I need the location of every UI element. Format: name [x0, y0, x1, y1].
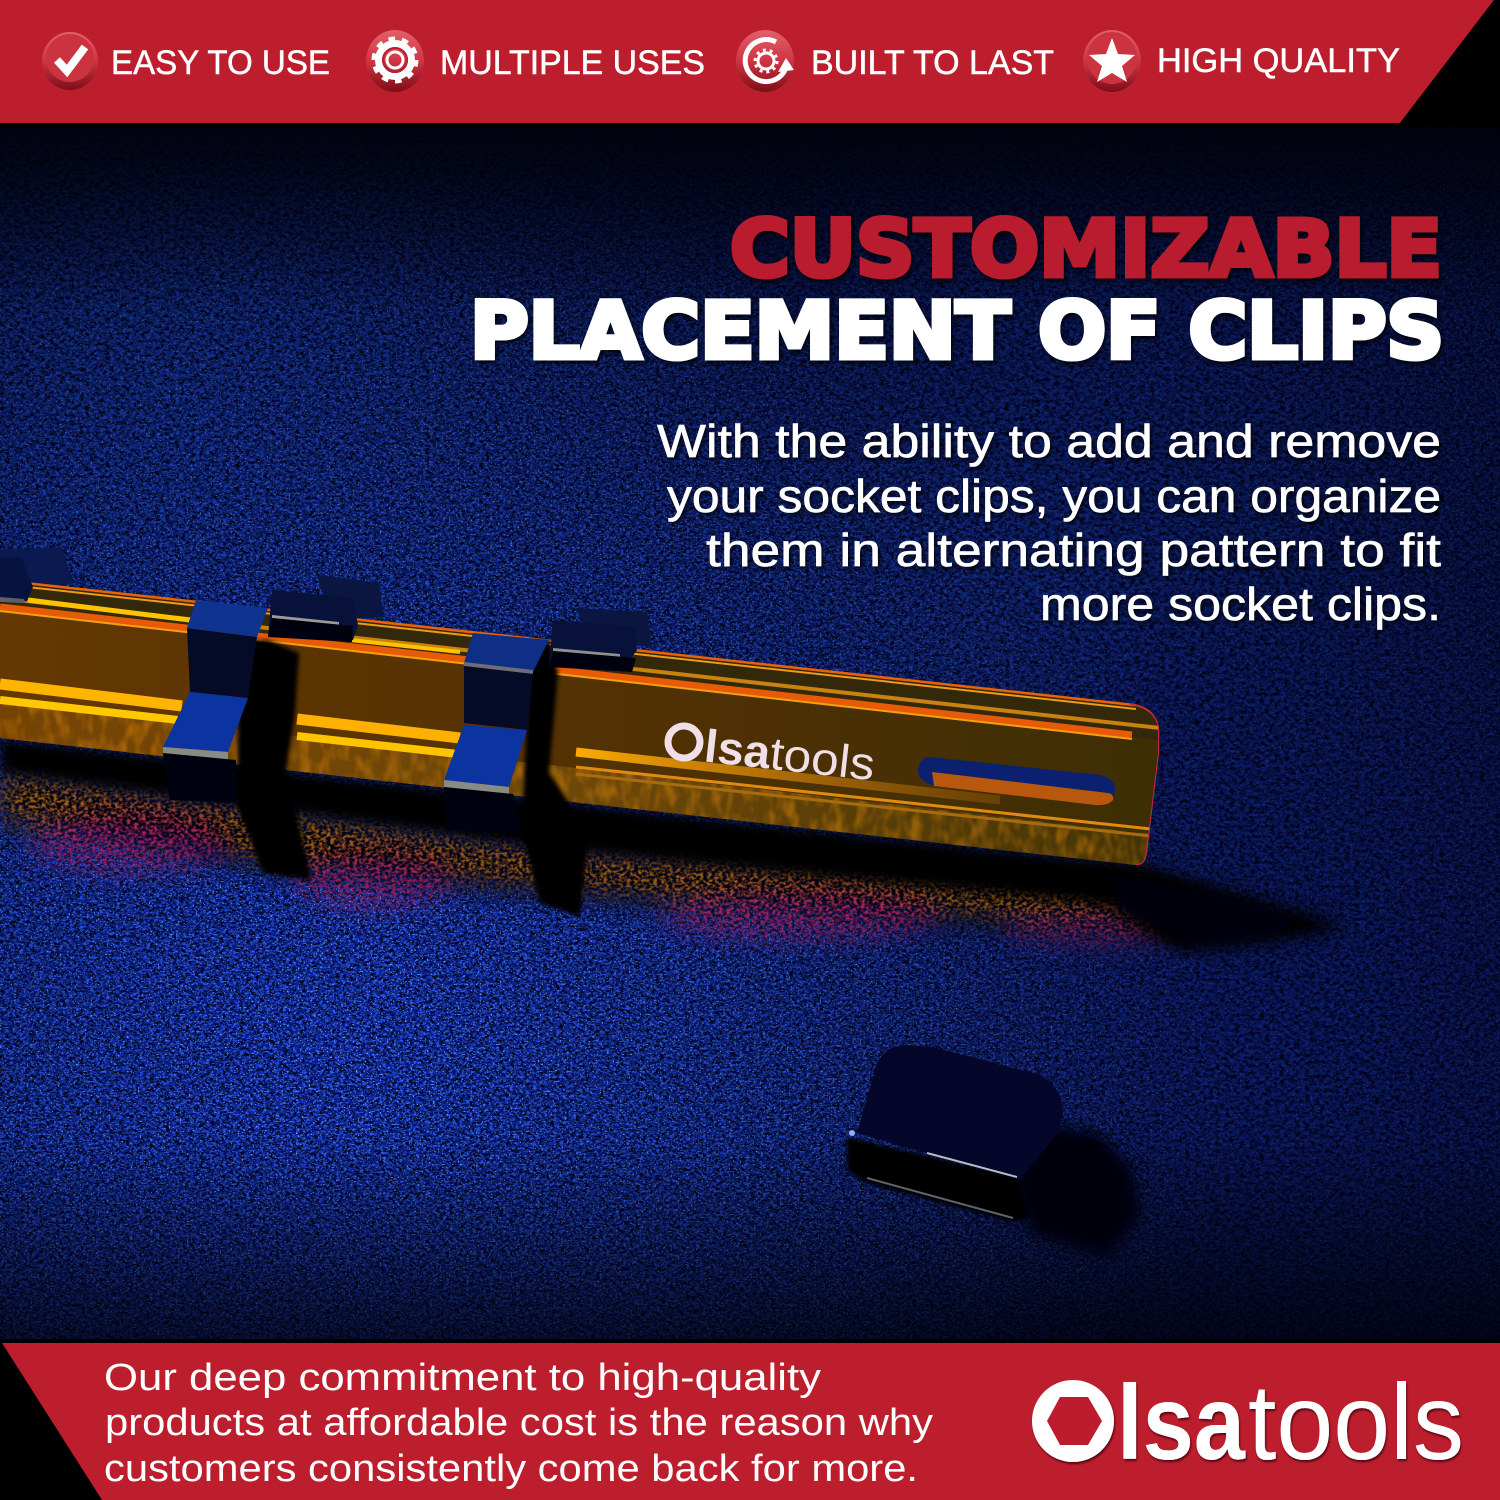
rail logo engraving — [662, 715, 878, 790]
rail logo engraving: lsa — [702, 719, 774, 779]
badge: built to last — [736, 30, 794, 92]
clip: first wrap-around clip — [163, 590, 358, 880]
brand logo: lsa — [1117, 1364, 1246, 1482]
description text: them in alternating pattern to fit — [706, 524, 1441, 576]
brand logo — [1032, 1361, 1464, 1482]
description text — [657, 415, 1441, 630]
label: multiple uses: MULTIPLE USES — [440, 44, 705, 82]
reflection of the rail on the fabric — [0, 770, 1180, 944]
bottom banner — [0, 1339, 1500, 1500]
badge: multiple uses — [366, 30, 424, 92]
top banner — [0, 0, 1500, 127]
description text: With the ability to add and remove — [657, 415, 1441, 467]
rail mounting slot — [918, 757, 1115, 805]
loose socket clip on the fabric — [847, 1045, 1140, 1257]
commitment statement: Our deep commitment to high-quality — [104, 1357, 821, 1399]
clip: second wrap-around clip — [444, 620, 637, 917]
clips: left edge — [0, 557, 33, 603]
heading line: customizable: CUSTOMIZABLE — [730, 205, 1442, 295]
rail logo engraving: tools — [767, 727, 878, 790]
rail: gold aluminium socket rail — [0, 579, 1170, 880]
badge: easy to use — [42, 32, 98, 90]
shadow beneath the rail — [0, 738, 1345, 950]
description text: your socket clips, you can organize — [667, 470, 1441, 522]
clips seated behind the rail — [0, 547, 652, 647]
label: easy to use: EASY TO USE — [111, 44, 330, 82]
description text: more socket clips. — [1040, 578, 1441, 630]
brand logo: tools — [1248, 1361, 1464, 1482]
heading line: placement of clips: PLACEMENT OF CLIPS — [470, 287, 1444, 377]
rail logo engraving: O — [663, 754, 665, 756]
commitment statement: customers consistently come back for more. — [104, 1448, 918, 1490]
brand logo: O — [1040, 1365, 1106, 1477]
label: high quality: HIGH QUALITY — [1157, 42, 1400, 80]
commitment statement: products at affordable cost is the reason why — [105, 1402, 933, 1444]
label: built to last: BUILT TO LAST — [811, 44, 1054, 82]
commitment statement — [104, 1357, 933, 1490]
heading — [470, 205, 1444, 377]
badge: high quality — [1083, 30, 1141, 92]
